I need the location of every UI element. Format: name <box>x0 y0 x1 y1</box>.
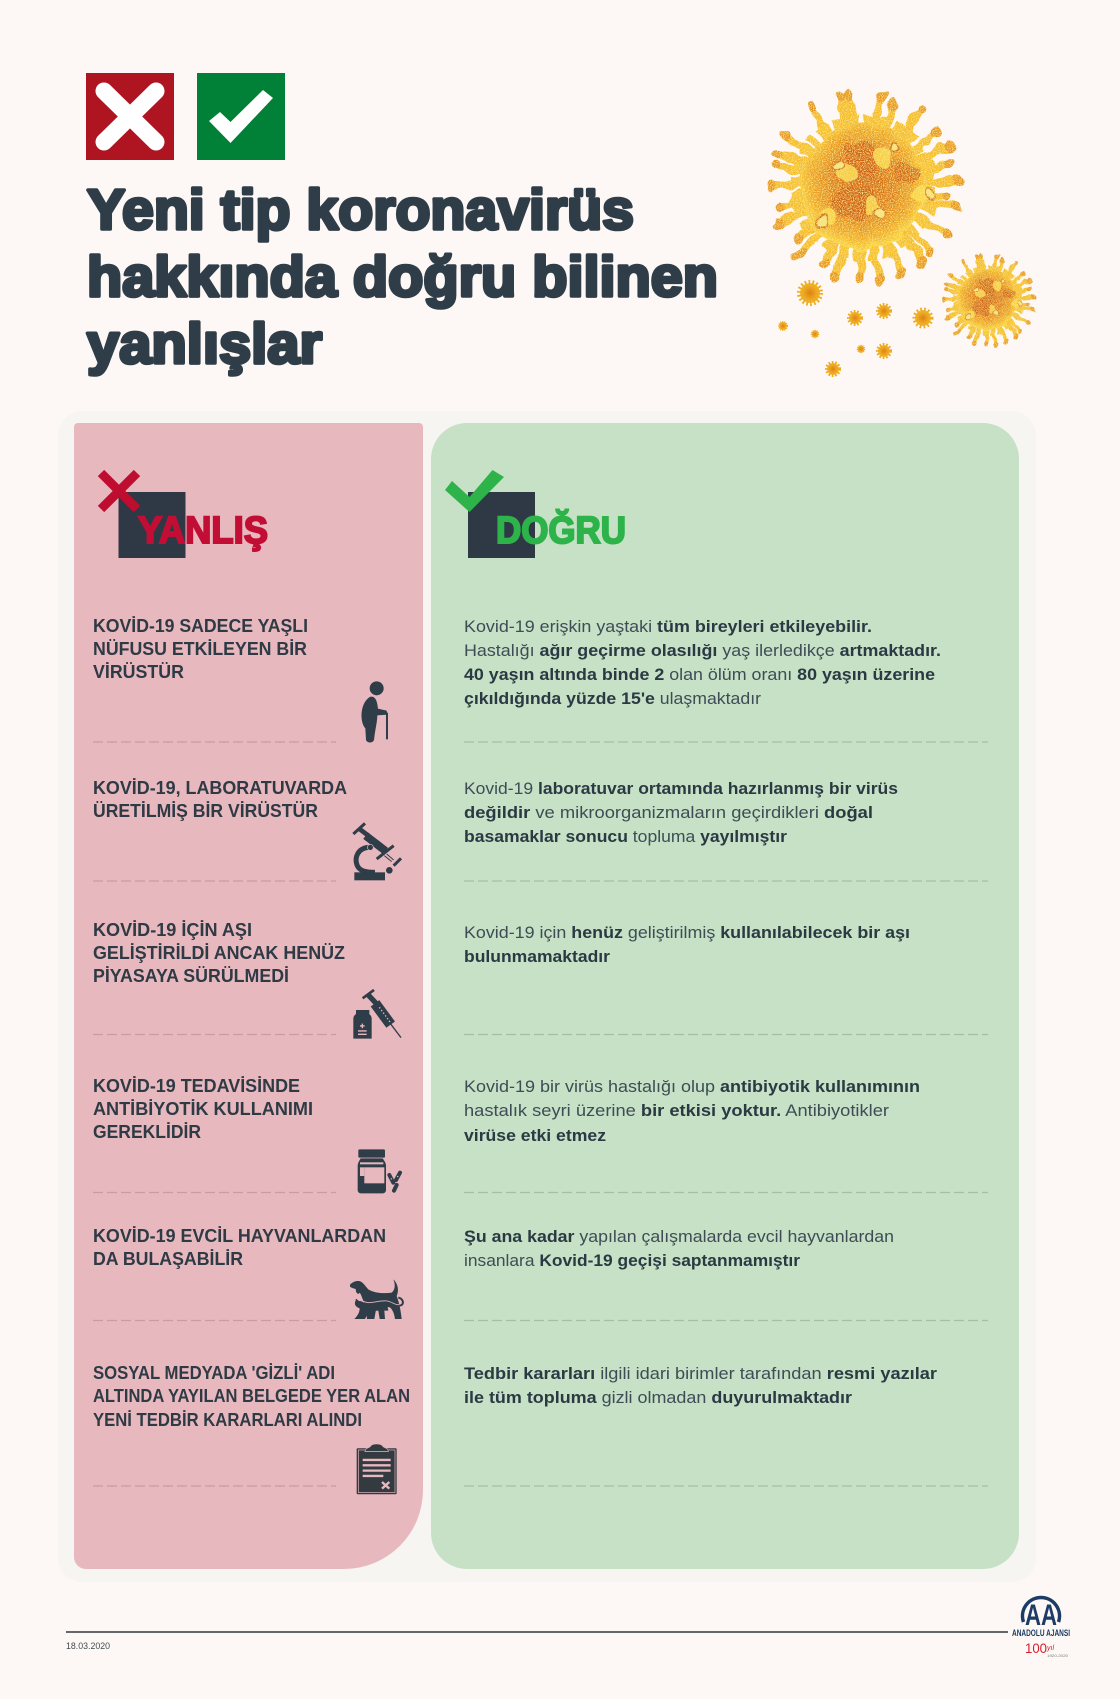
logo: Anadolu Ajansı <box>1012 1598 1070 1658</box>
panel: outer frame <box>58 411 1036 1582</box>
icon: microscope <box>353 823 401 880</box>
row 1 fact text: 40 yaşın altında binde 2 olan ölüm oranı 80 yaşın üzerine <box>464 665 935 684</box>
row 3 myth text: KOVİD-19 İÇİN AŞI <box>93 920 252 940</box>
row 3 fact text: Kovid-19 için henüz geliştirilmiş kullanılabilecek bir aşı <box>464 923 910 942</box>
row 4 myth text: GEREKLİDİR <box>93 1122 201 1142</box>
row 3 fact text <box>464 923 910 966</box>
row 2 fact text: Kovid-19 laboratuvar ortamında hazırlanmış bir virüs <box>464 779 898 798</box>
icon: dog and cat <box>350 1279 403 1319</box>
icon: syringe and vial <box>353 990 401 1039</box>
row 2 fact text: değildir ve mikroorganizmaların geçirdikleri doğal <box>464 803 873 822</box>
row 3 myth text: GELİŞTİRİLDİ ANCAK HENÜZ <box>93 943 345 963</box>
illustration: coronavirus particles <box>765 90 1036 375</box>
title: Yeni tip koronavirüs <box>87 178 634 242</box>
row 1 fact text: Kovid-19 erişkin yaştaki tüm bireyleri etkileyebilir. <box>464 617 872 636</box>
row 1 myth text: KOVİD-19 SADECE YAŞLI <box>93 616 308 636</box>
title: yanlışlar <box>87 312 322 376</box>
heading: doğru: DOĞRU <box>496 508 626 552</box>
logo: Anadolu Ajansı: 1920-2020 <box>1047 1653 1069 1658</box>
heading: doğru <box>445 470 626 558</box>
row 1 fact text: çıkıldığında yüzde 15'e ulaşmaktadır <box>464 689 761 708</box>
row 5 myth text: KOVİD-19 EVCİL HAYVANLARDAN <box>93 1226 386 1246</box>
heading: yanlış <box>101 473 268 558</box>
row 3 fact text: bulunmamaktadır <box>464 947 610 966</box>
row 5 fact text: Şu ana kadar yapılan çalışmalarda evcil hayvanlardan <box>464 1227 894 1246</box>
dashed row dividers <box>93 742 988 1486</box>
row 3 myth text: PİYASAYA SÜRÜLMEDİ <box>93 966 289 986</box>
row 6 myth text: ALTINDA YAYILAN BELGEDE YER ALAN <box>93 1386 410 1406</box>
panel: yanlış column <box>74 423 423 1569</box>
title: hakkında doğru bilinen <box>87 245 718 309</box>
row 2 fact text: basamaklar sonucu topluma yayılmıştır <box>464 827 787 846</box>
row 3 myth text <box>93 920 345 986</box>
logo: Anadolu Ajansı: AA <box>1025 1599 1057 1632</box>
footer rule <box>66 1631 1008 1633</box>
row 4 myth text <box>93 1076 313 1142</box>
row 1 fact text <box>464 617 941 708</box>
row 4 fact text: Kovid-19 bir virüs hastalığı olup antibiyotik kullanımının <box>464 1077 920 1096</box>
row 1 myth text: VİRÜSTÜR <box>93 662 184 682</box>
row 5 fact text: insanlara Kovid-19 geçişi saptanmamıştır <box>464 1251 800 1270</box>
logo: Anadolu Ajansı: ANADOLU AJANSI <box>1012 1628 1070 1638</box>
heading: yanlış: YANLIŞ <box>138 510 268 552</box>
logo: Anadolu Ajansı: yıl <box>1046 1645 1054 1652</box>
row 6 fact text: Tedbir kararları ilgili idari birimler tarafından resmi yazılar <box>464 1364 937 1383</box>
icon: pill bottle and capsules <box>358 1149 400 1193</box>
row 1 myth text <box>93 616 308 682</box>
icon: red cross square <box>86 73 174 160</box>
logo: Anadolu Ajansı: 100 <box>1025 1640 1047 1656</box>
row 6 myth text <box>93 1363 410 1430</box>
row 2 myth text: ÜRETİLMİŞ BİR VİRÜSTÜR <box>93 801 318 821</box>
row 1 fact text: Hastalığı ağır geçirme olasılığı yaş ilerledikçe artmaktadır. <box>464 641 941 660</box>
row 4 fact text <box>464 1077 920 1145</box>
icon: clipboard with cross <box>357 1444 397 1494</box>
row 4 fact text: hastalık seyri üzerine bir etkisi yoktur. Antibiyotikler <box>464 1101 889 1120</box>
row 5 myth text <box>93 1226 386 1269</box>
row 4 myth text: KOVİD-19 TEDAVİSİNDE <box>93 1076 300 1096</box>
title <box>87 178 718 376</box>
row 2 myth text: KOVİD-19, LABORATUVARDA <box>93 778 347 798</box>
row 6 myth text: SOSYAL MEDYADA 'GİZLİ' ADI <box>93 1363 335 1383</box>
row 5 myth text: DA BULAŞABİLİR <box>93 1249 243 1269</box>
row 4 fact text: virüse etki etmez <box>464 1126 606 1145</box>
row 2 myth text <box>93 778 347 821</box>
date: 18.03.2020 <box>66 1641 110 1651</box>
row 6 fact text: ile tüm topluma gizli olmadan duyurulmaktadır <box>464 1388 852 1407</box>
row 6 myth text: YENİ TEDBİR KARARLARI ALINDI <box>93 1410 362 1430</box>
icon: green check square <box>197 73 285 160</box>
row 1 myth text: NÜFUSU ETKİLEYEN BİR <box>93 639 307 659</box>
panel: doğru column <box>431 423 1019 1569</box>
row 2 fact text <box>464 779 898 846</box>
row 6 fact text <box>464 1364 937 1407</box>
row 5 fact text <box>464 1227 894 1270</box>
row 4 myth text: ANTİBİYOTİK KULLANIMI <box>93 1099 313 1119</box>
icon: elderly person with cane <box>361 681 388 742</box>
